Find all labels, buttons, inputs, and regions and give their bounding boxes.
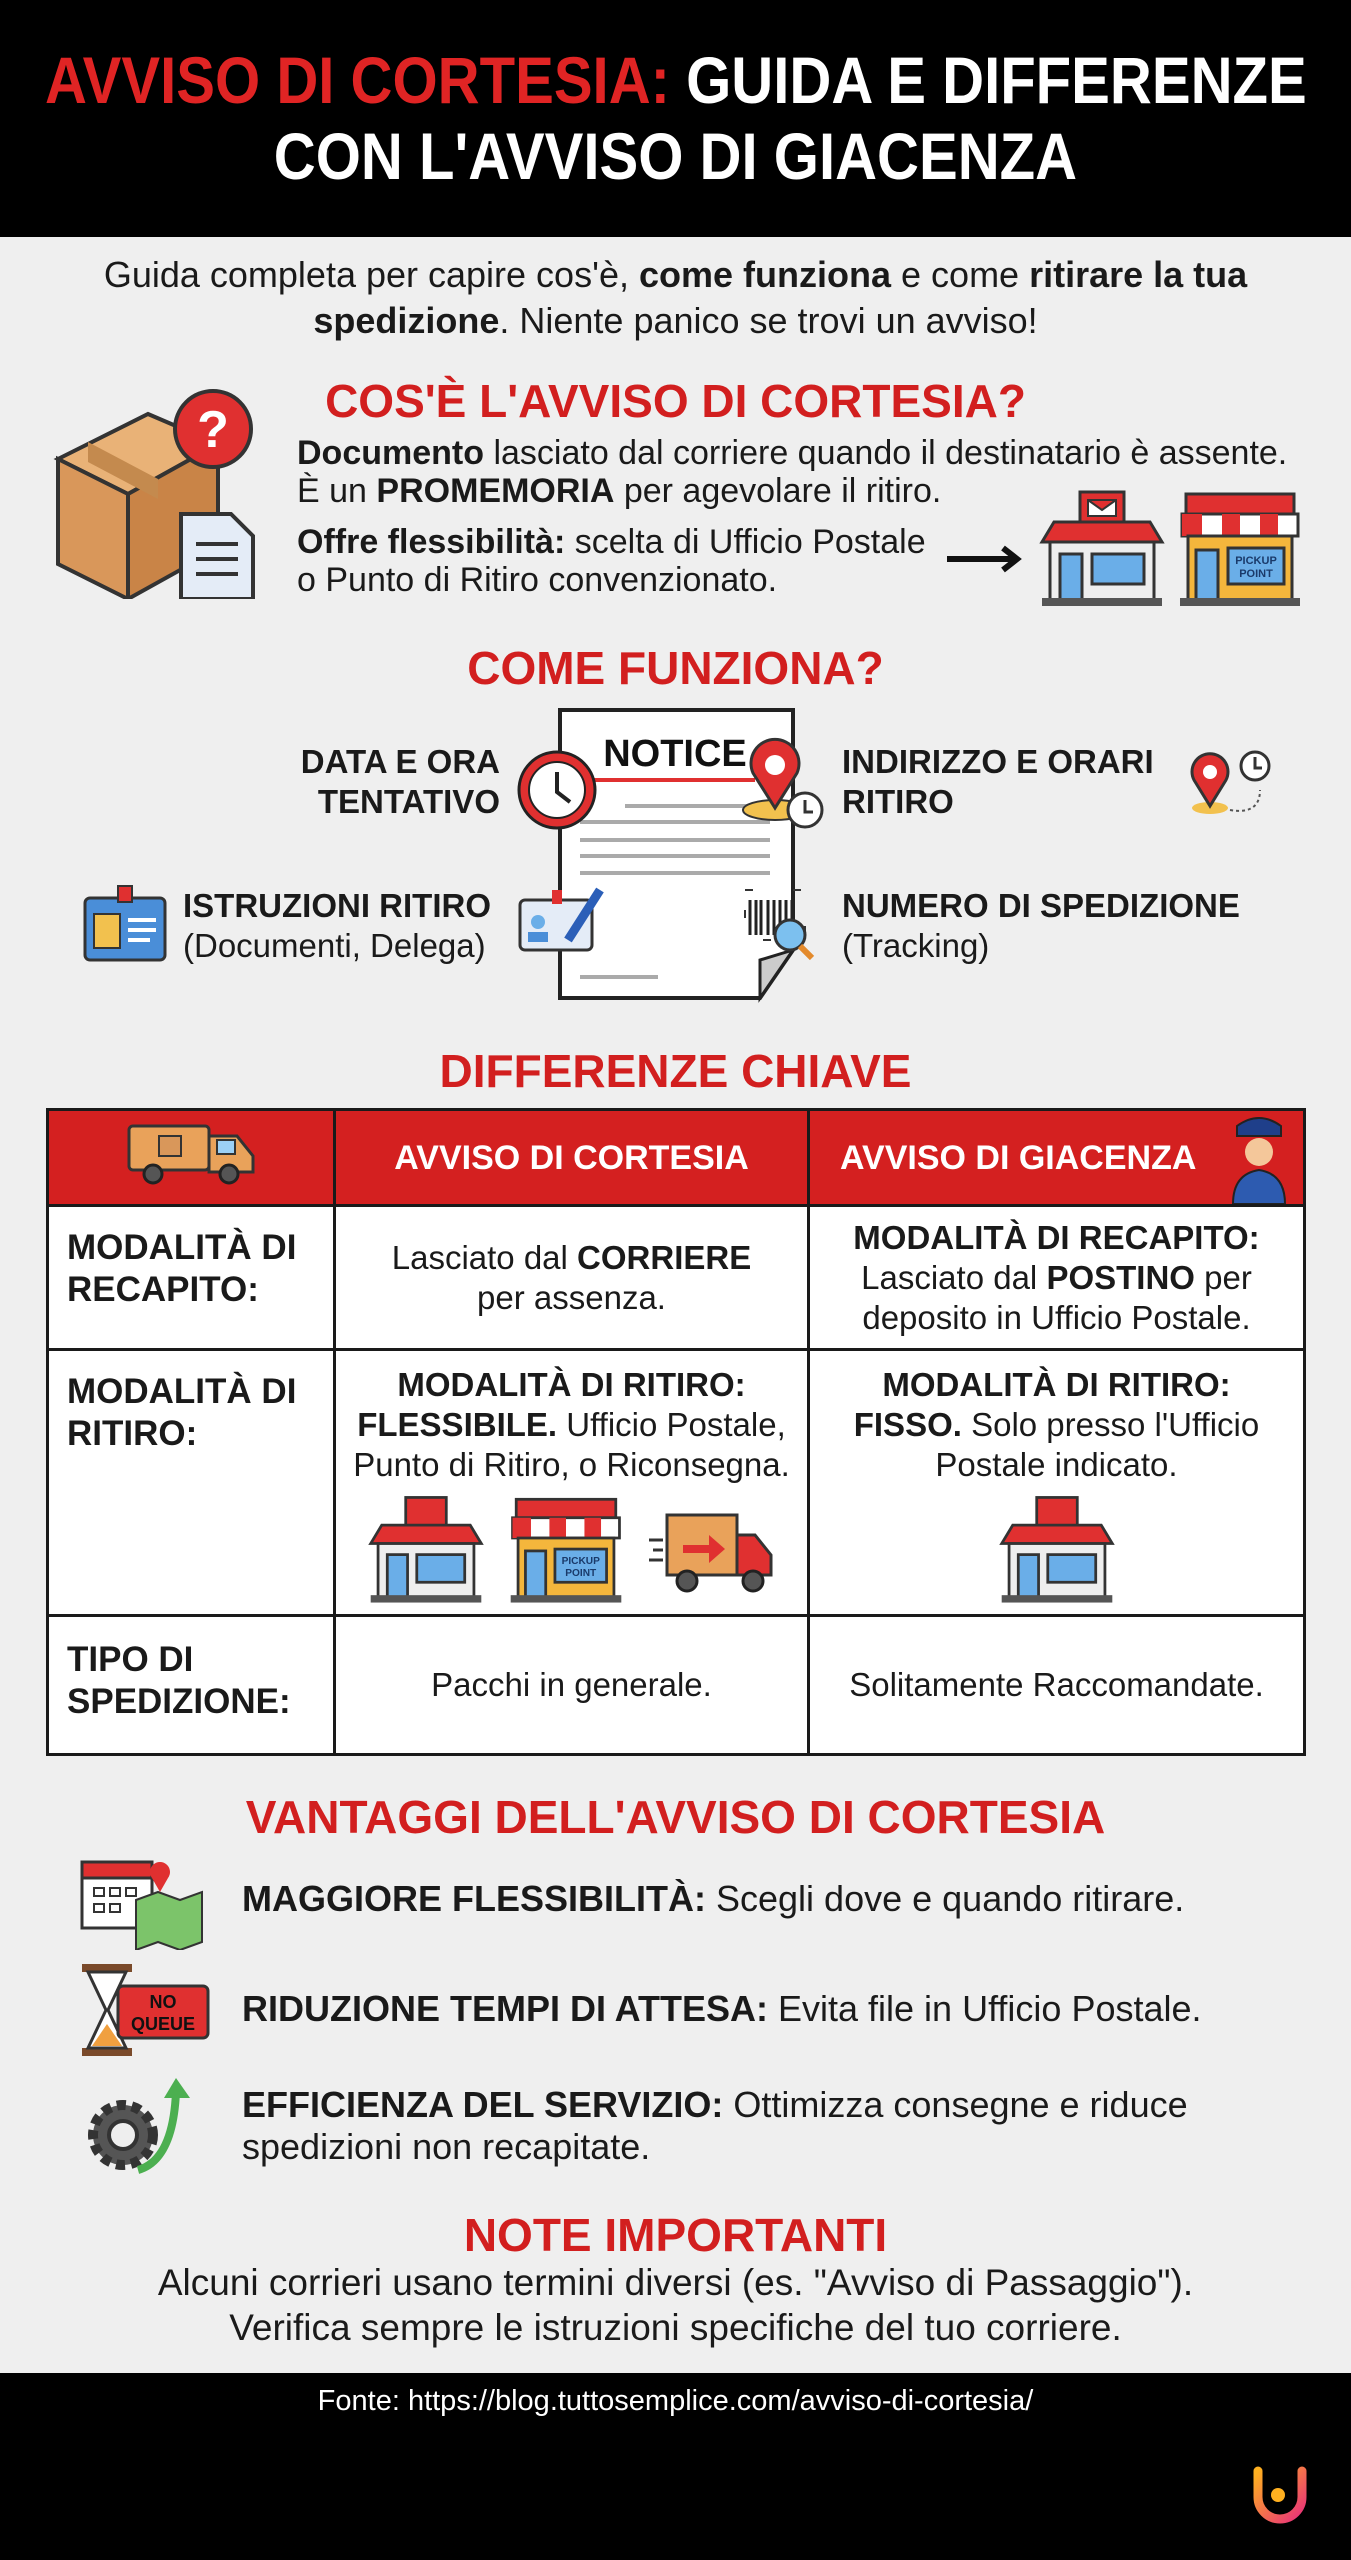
row: modalità di ritiro: POINT: [565, 1568, 597, 1579]
clock: [519, 752, 595, 828]
text block: flexibility: o Punto di Ritiro convenzionato.: [297, 561, 777, 599]
text block: flexibility: [297, 523, 926, 599]
label: indirizzo e orari: [842, 743, 1154, 820]
table header: AVVISO DI GIACENZA: [840, 1138, 1196, 1176]
text block: definition: [297, 434, 1287, 510]
table header: AVVISO DI CORTESIA: [394, 1138, 749, 1176]
footer: [0, 2373, 1351, 2560]
pin: [743, 739, 822, 827]
label: data e ora: DATA E ORA: [301, 743, 500, 780]
text block: definition: Documento lasciato dal corriere quando il destinatario è assente.: [297, 434, 1287, 472]
row: modalità di ritiro: RITIRO:: [67, 1414, 197, 1453]
label: numero di spedizione: [842, 887, 1240, 964]
row: tipo di spedizione: Pacchi in generale.: [431, 1666, 712, 1703]
text: EFFICIENZA DEL SERVIZIO: Ottimizza consegne e riduce: [242, 2084, 1188, 2125]
barcode: [745, 890, 812, 958]
notice document illustration: NOTICE: [603, 733, 747, 775]
icon: hourglass no queue: QUEUE: [131, 2014, 195, 2034]
icon: hourglass no queue: [82, 1964, 210, 2056]
label: data e ora: TENTATIVO: [318, 783, 500, 820]
row: modalità di ritiro: FISSO. Solo presso l'Ufficio: [854, 1406, 1259, 1443]
label: data e ora: [301, 743, 500, 820]
icon: pin and clock: [1190, 750, 1270, 814]
row: modalità di recapito: Lasciato dal POSTINO per: [861, 1258, 1252, 1296]
row: modalità di recapito: MODALITÀ DI RECAPITO:: [853, 1218, 1260, 1256]
row: modalità di recapito: MODALITÀ DI: [67, 1228, 296, 1267]
icon: hourglass no queue: NO: [150, 1992, 176, 2012]
vantaggio 1: [80, 1860, 1184, 1950]
comparison table: [46, 1108, 1306, 1756]
text: MAGGIORE FLESSIBILITÀ: Scegli dove e quando ritirare.: [242, 1878, 1184, 1919]
icon: id badge: [84, 885, 166, 962]
text block: flexibility: Offre flessibilità: scelta di Ufficio Postale: [297, 523, 926, 561]
row: modalità di recapito: per assenza.: [477, 1278, 666, 1316]
heading: differenze chiave: DIFFERENZE CHIAVE: [440, 1045, 911, 1097]
note text: [158, 2262, 1193, 2348]
vantaggio 2: [82, 1964, 1202, 2056]
note text: Alcuni corrieri usano termini diversi (es. "Avviso di Passaggio").: [158, 2262, 1193, 2303]
row: tipo di spedizione: SPEDIZIONE:: [67, 1682, 291, 1721]
row: modalità di recapito: [67, 1218, 1260, 1336]
logo: [1254, 2466, 1306, 2524]
row: modalità di recapito: RECAPITO:: [67, 1270, 259, 1309]
row: tipo di spedizione: [67, 1640, 1264, 1721]
table header: [49, 1111, 1303, 1721]
row: modalità di recapito: Lasciato dal CORRIERE: [392, 1238, 751, 1276]
intro text: [104, 254, 1248, 341]
vantaggio 3: [88, 2078, 1188, 2174]
icon: box with question and document: [54, 389, 255, 599]
row: modalità di ritiro: Postale indicato.: [935, 1446, 1178, 1483]
row: tipo di spedizione: Solitamente Raccomandate.: [849, 1666, 1264, 1703]
row: modalità di ritiro: [67, 1366, 1259, 1603]
text: [242, 2084, 1188, 2167]
text: spedizioni non recapitate.: [242, 2126, 650, 2167]
label: numero di spedizione: NUMERO DI SPEDIZIONE: [842, 887, 1240, 924]
heading: note importanti: NOTE IMPORTANTI: [464, 2209, 887, 2261]
row: modalità di ritiro: MODALITÀ DI: [67, 1372, 296, 1411]
title: CON L'AVVISO DI GIACENZA: [274, 119, 1077, 193]
label: numero di spedizione: (Tracking): [842, 927, 989, 964]
header band: [0, 0, 1351, 237]
icon: gear and arrow: [88, 2078, 190, 2174]
title: AVVISO DI CORTESIA: GUIDA E DIFFERENZE: [45, 43, 1306, 117]
label: istruzioni ritiro: (Documenti, Delega): [183, 927, 486, 964]
label: indirizzo e orari: INDIRIZZO E ORARI: [842, 743, 1154, 780]
notice document illustration: [518, 708, 824, 1003]
heading: come funziona: COME FUNZIONA?: [467, 642, 884, 694]
intro text: spedizione. Niente panico se trovi un avviso!: [313, 300, 1038, 341]
text block: definition: È un PROMEMORIA per agevolare il ritiro.: [297, 472, 941, 510]
label: istruzioni ritiro: [183, 887, 491, 964]
row: modalità di ritiro: FLESSIBILE. Ufficio Postale,: [357, 1406, 786, 1443]
row: modalità di ritiro: MODALITÀ DI RITIRO:: [397, 1366, 746, 1403]
icon: box with question and document: ?: [197, 401, 229, 459]
label: indirizzo e orari: RITIRO: [842, 783, 954, 820]
intro text: Guida completa per capire cos'è, come funziona e come ritirare la tua: [104, 254, 1247, 295]
row: modalità di ritiro: PICKUP: [561, 1556, 600, 1567]
heading: vantaggi: VANTAGGI DELL'AVVISO DI CORTESIA: [246, 1791, 1105, 1843]
note text: Verifica sempre le istruzioni specifiche del tuo corriere.: [229, 2307, 1122, 2348]
icon: pickup point: POINT: [1239, 568, 1273, 580]
icon: pickup point: PICKUP: [1235, 555, 1277, 567]
id card with pen: [520, 890, 600, 950]
row: tipo di spedizione: TIPO DI: [67, 1640, 193, 1679]
icon: pickup point: [1180, 492, 1300, 606]
source text: Fonte: https://blog.tuttosemplice.com/avviso-di-cortesia/: [318, 2385, 1033, 2417]
icon: calendar and map: [80, 1860, 203, 1950]
icon: post office: [1039, 490, 1165, 606]
heading: cos'è: COS'È L'AVVISO DI CORTESIA?: [325, 375, 1026, 427]
arrow: [947, 546, 1022, 572]
row: modalità di recapito: deposito in Ufficio Postale.: [862, 1298, 1251, 1336]
text: RIDUZIONE TEMPI DI ATTESA: Evita file in Ufficio Postale.: [242, 1988, 1202, 2029]
row: modalità di ritiro: MODALITÀ DI RITIRO:: [882, 1366, 1231, 1403]
title: [45, 43, 1306, 193]
row: modalità di ritiro: Punto di Ritiro, o Riconsegna.: [353, 1446, 790, 1483]
label: istruzioni ritiro: ISTRUZIONI RITIRO: [183, 887, 491, 924]
